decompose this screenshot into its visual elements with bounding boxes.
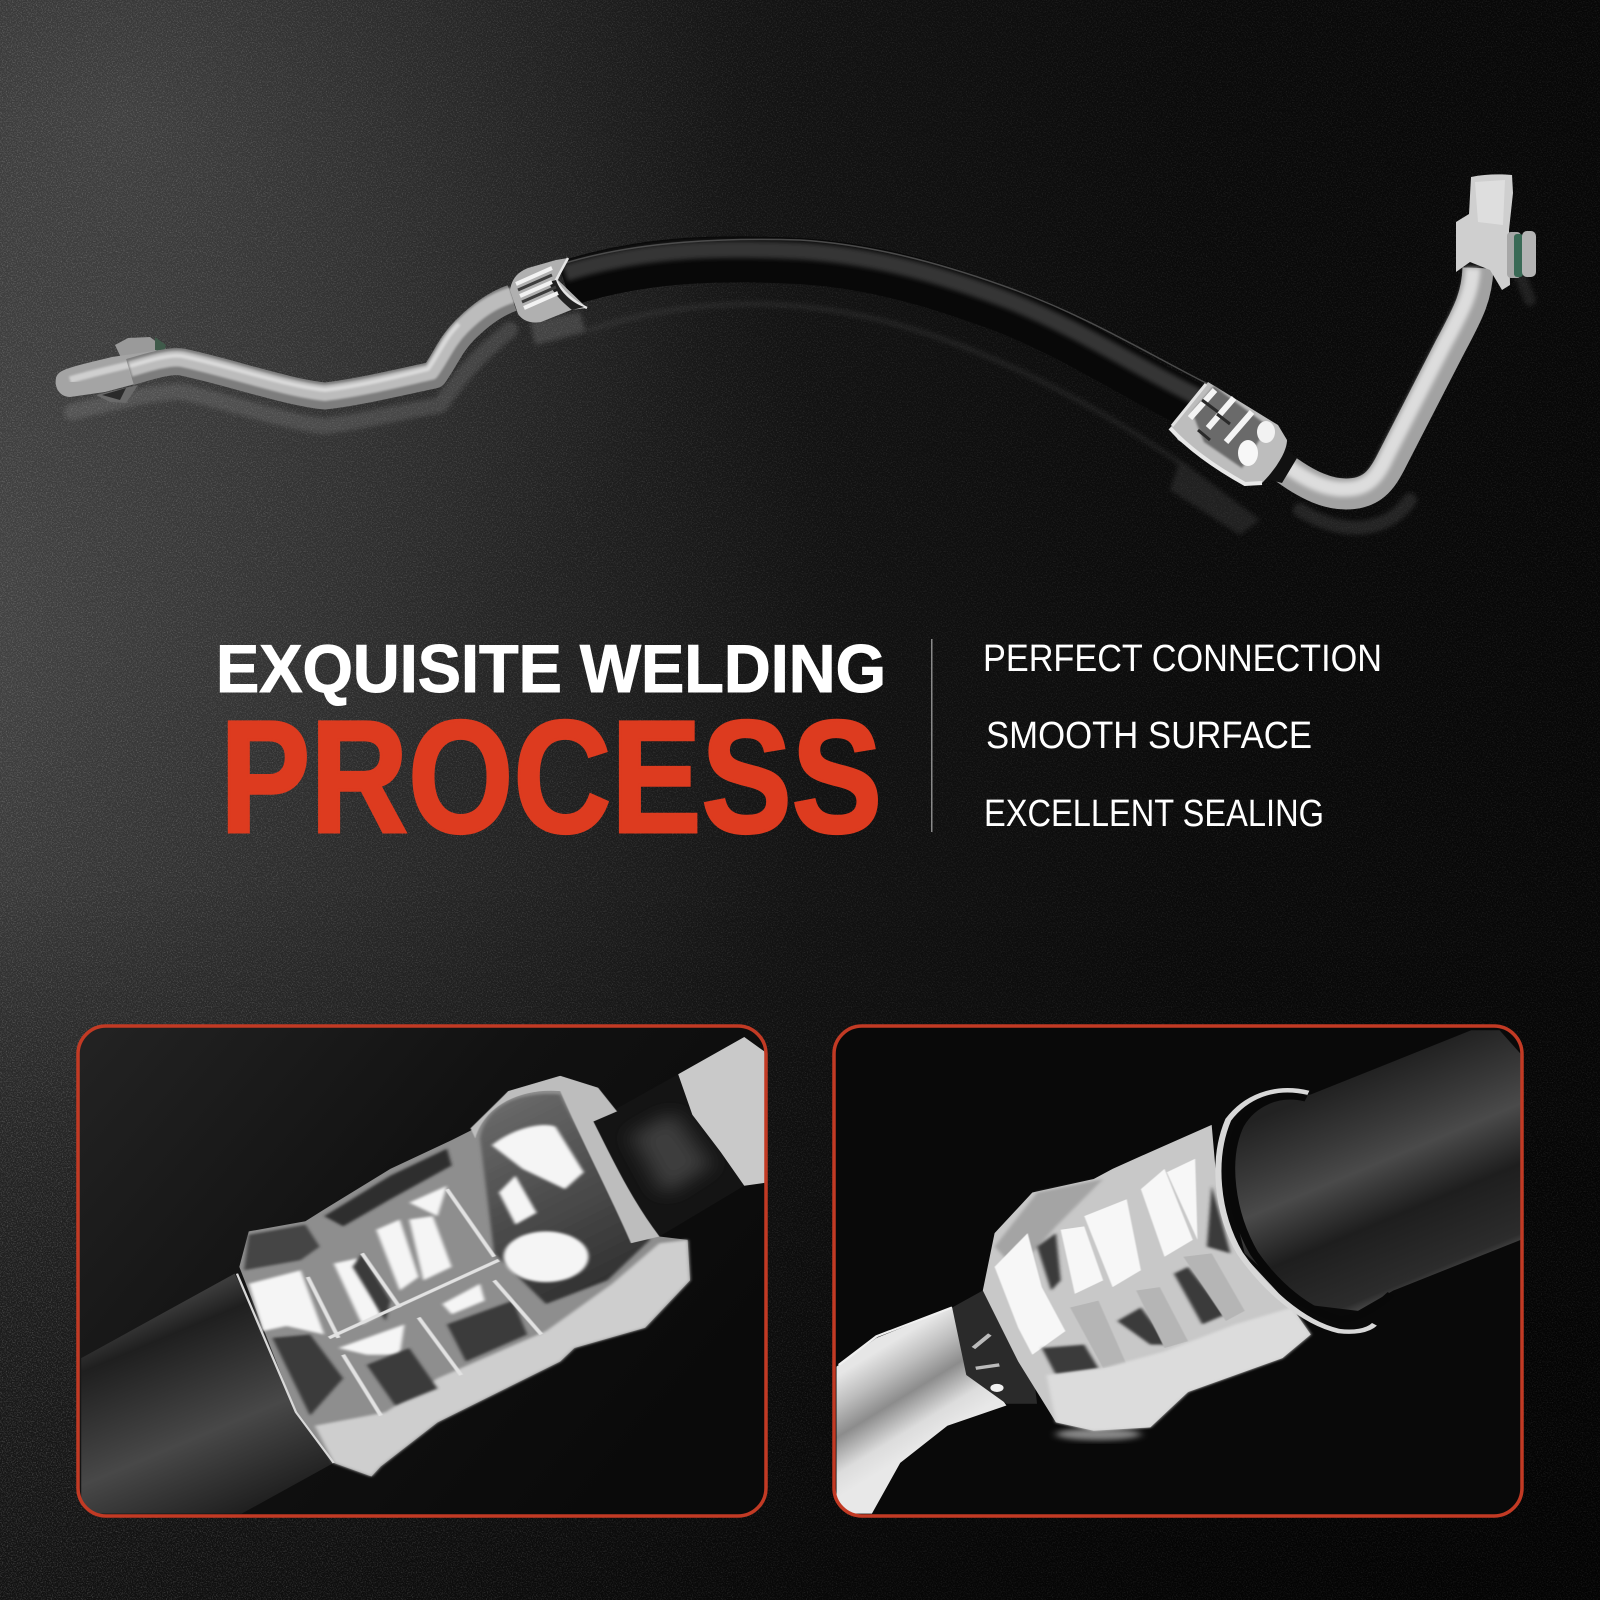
feature 3: EXCELLENT SEALING [984, 793, 1324, 835]
metal tube [837, 1307, 1006, 1514]
metal line left [130, 295, 512, 396]
dark recesses [1037, 1186, 1231, 1375]
hose shadow gap [1231, 1096, 1391, 1319]
collar marks [973, 1334, 999, 1368]
tube top rim [839, 1307, 952, 1365]
rubber hose [562, 239, 1208, 408]
feature 2: SMOOTH SURFACE [986, 715, 1312, 757]
rubber hose [81, 1274, 334, 1514]
upper dark band [244, 1225, 320, 1270]
white highlights [249, 1125, 589, 1355]
right crimp ferrule [1170, 382, 1287, 484]
feature 1: PERFECT CONNECTION [983, 638, 1382, 680]
lower bright band [315, 1240, 690, 1476]
rubber hose [1231, 1030, 1521, 1311]
left end fitting [56, 337, 166, 403]
panel border [834, 1026, 1522, 1516]
feature list [983, 638, 1382, 835]
right bracket and o-ring [1456, 174, 1536, 290]
metal line right [1280, 268, 1478, 494]
lower ribs [1070, 1253, 1245, 1368]
left crimp ferrule [510, 258, 587, 323]
divider [931, 639, 932, 832]
glow under ferrule [1056, 1428, 1141, 1440]
lower bright band [1047, 1307, 1311, 1431]
dark collar [952, 1291, 1037, 1404]
hose ring edge [237, 1274, 334, 1463]
dark recesses [272, 1253, 527, 1416]
ring [1218, 1090, 1374, 1332]
ferrule body [983, 1125, 1311, 1431]
panel border [78, 1026, 766, 1516]
panel: right crimp close-up [834, 1026, 1522, 1516]
bright tiles [995, 1159, 1198, 1355]
black collar [1262, 445, 1297, 483]
product: hose assembly reflection [72, 275, 1530, 535]
product: hose assembly [56, 174, 1536, 494]
panel: left crimp close-up [78, 1026, 768, 1516]
heading line 2: PROCESS [220, 687, 882, 866]
title [216, 631, 886, 866]
dome shadow [480, 1094, 650, 1304]
heading line 1: EXQUISITE WELDING [216, 631, 886, 707]
ferrule body [239, 1076, 690, 1476]
black sleeve [593, 1074, 744, 1236]
rib edges [308, 1189, 541, 1416]
upper dome [994, 1179, 1102, 1257]
sleeve highlight [631, 1111, 711, 1196]
metal tube [678, 1037, 768, 1186]
dome rim [471, 1076, 659, 1243]
